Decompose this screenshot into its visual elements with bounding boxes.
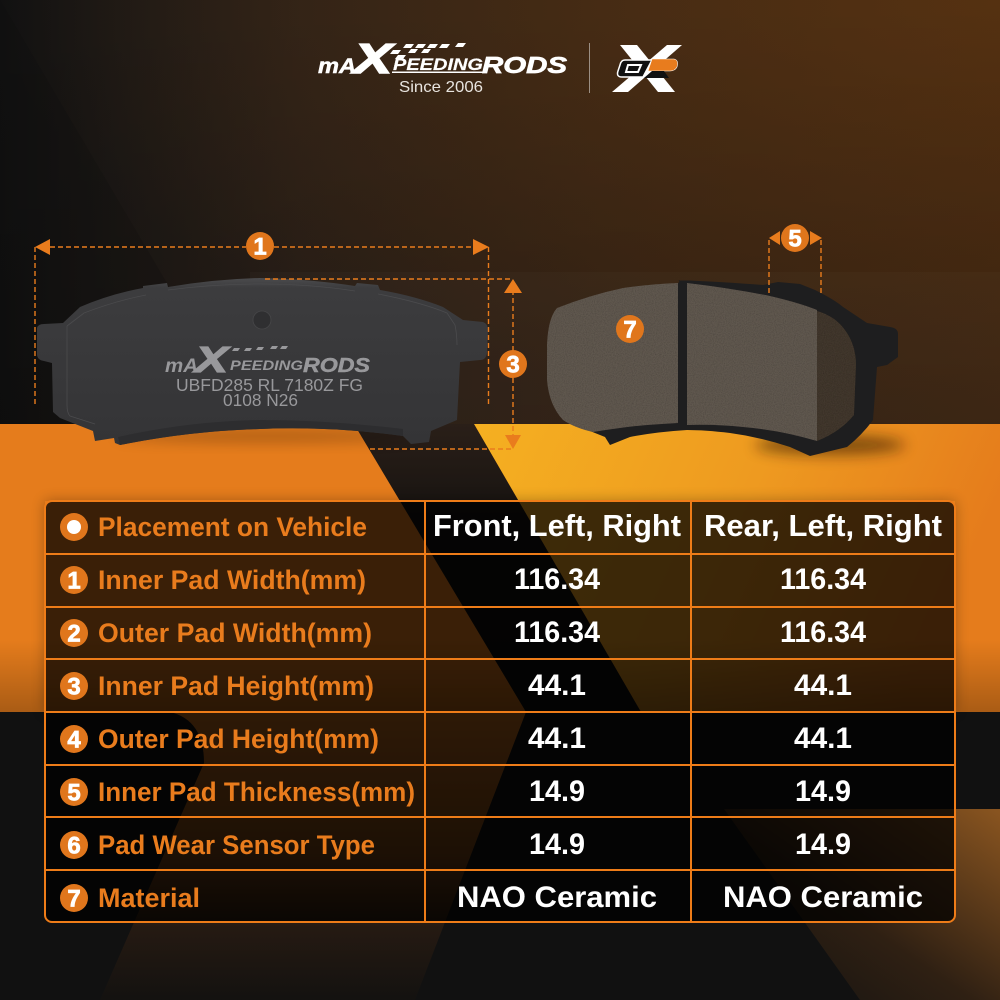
dimension 5: pad thickness: 5 [788, 226, 802, 252]
logo wordmark: PEEDING [393, 55, 483, 74]
logo checker flag [390, 43, 466, 59]
row: material [60, 881, 923, 914]
row: inner pad height: 3 [67, 674, 81, 700]
row: inner pad thickness: 14.9 [529, 775, 585, 808]
row: inner pad thickness: 14.9 [795, 775, 851, 808]
dimension 5: pad thickness [769, 224, 822, 294]
row: outer pad width: 116.34 [514, 616, 600, 649]
dimension 1: pad width: 1 [253, 234, 267, 260]
row: inner pad width: 1 [67, 568, 81, 594]
pad body [37, 278, 488, 445]
logo wordmark: mA [318, 55, 356, 78]
row: pad wear sensor type: Pad Wear Sensor Type [98, 830, 375, 860]
since 2006: Since 2006 [399, 79, 483, 96]
logo wordmark [318, 35, 568, 82]
row: inner pad thickness [60, 775, 851, 808]
row: material: Material [98, 883, 200, 913]
row: inner pad width [60, 563, 866, 596]
row: pad wear sensor type [60, 828, 851, 861]
pad shadow [115, 430, 415, 442]
row: inner pad height: 44.1 [794, 669, 852, 702]
row: inner pad width: 116.34 [780, 563, 866, 596]
friction pad shadow [755, 435, 905, 455]
marker 7: friction material [616, 315, 644, 344]
table panel [45, 501, 955, 922]
row: inner pad height: 44.1 [528, 669, 586, 702]
logo: maXpeedingRods [318, 35, 568, 96]
pad engraved logo: X [192, 339, 231, 380]
row: pad wear sensor type: 14.9 [529, 828, 585, 861]
logo: OR X badge [612, 45, 682, 92]
pad hole [253, 311, 271, 329]
row: material: NAO Ceramic [457, 881, 657, 914]
row: outer pad width: 2 [67, 620, 81, 648]
row: placement on vehicle: Placement on Vehicle [98, 512, 367, 542]
specification table [45, 501, 955, 922]
logo wordmark: RODS [482, 52, 568, 78]
brake pad: friction side view [547, 280, 905, 456]
row: placement on vehicle [60, 508, 942, 543]
pad engraved logo [165, 339, 371, 410]
row: placement on vehicle: Front, Left, Right [433, 508, 681, 543]
part number: UBFD285 RL 7180Z FG [176, 375, 363, 395]
row: outer pad height: 44.1 [794, 722, 852, 755]
friction block side [817, 311, 856, 441]
logo divider [589, 43, 590, 93]
friction block right [687, 283, 817, 441]
row: material: NAO Ceramic [723, 881, 923, 914]
friction block left [547, 283, 678, 432]
table glow on background [45, 501, 955, 712]
row: outer pad width: 116.34 [780, 616, 866, 649]
row: inner pad thickness: 5 [67, 780, 81, 806]
row: inner pad width: 116.34 [514, 563, 600, 596]
brake pad: back plate view [37, 278, 488, 445]
table grid [45, 501, 955, 922]
row: outer pad height: 44.1 [528, 722, 586, 755]
pad engraved logo: mA [165, 356, 198, 377]
row: outer pad height [60, 722, 852, 755]
row: outer pad height: Outer Pad Height(mm) [98, 724, 379, 754]
pad bottom rim [118, 420, 403, 445]
pad inner plate outline [67, 284, 457, 424]
pad engraved logo: RODS [303, 355, 371, 377]
dimension 3: pad height [265, 279, 527, 449]
row: placement on vehicle: Rear, Left, Right [704, 508, 942, 543]
backing plate [590, 280, 898, 456]
marker 7: friction material: 7 [623, 316, 637, 344]
row: inner pad width: Inner Pad Width(mm) [98, 565, 366, 595]
pad engraved logo: PEEDING [230, 357, 303, 373]
row: inner pad height: Inner Pad Height(mm) [98, 671, 374, 701]
row: material: 7 [67, 886, 81, 912]
row: pad wear sensor type: 14.9 [795, 828, 851, 861]
row: outer pad width [60, 616, 866, 649]
row: pad wear sensor type: 6 [67, 832, 81, 860]
logo wordmark: X [351, 35, 396, 82]
dimension 1: pad width [35, 232, 489, 404]
row: inner pad height [60, 669, 852, 702]
row: outer pad width: Outer Pad Width(mm) [98, 618, 372, 648]
dimension 3: pad height: 3 [506, 352, 520, 378]
row: outer pad height: 4 [67, 726, 81, 754]
row: inner pad thickness: Inner Pad Thickness(mm) [98, 777, 415, 807]
batch number: 0108 N26 [223, 390, 298, 410]
